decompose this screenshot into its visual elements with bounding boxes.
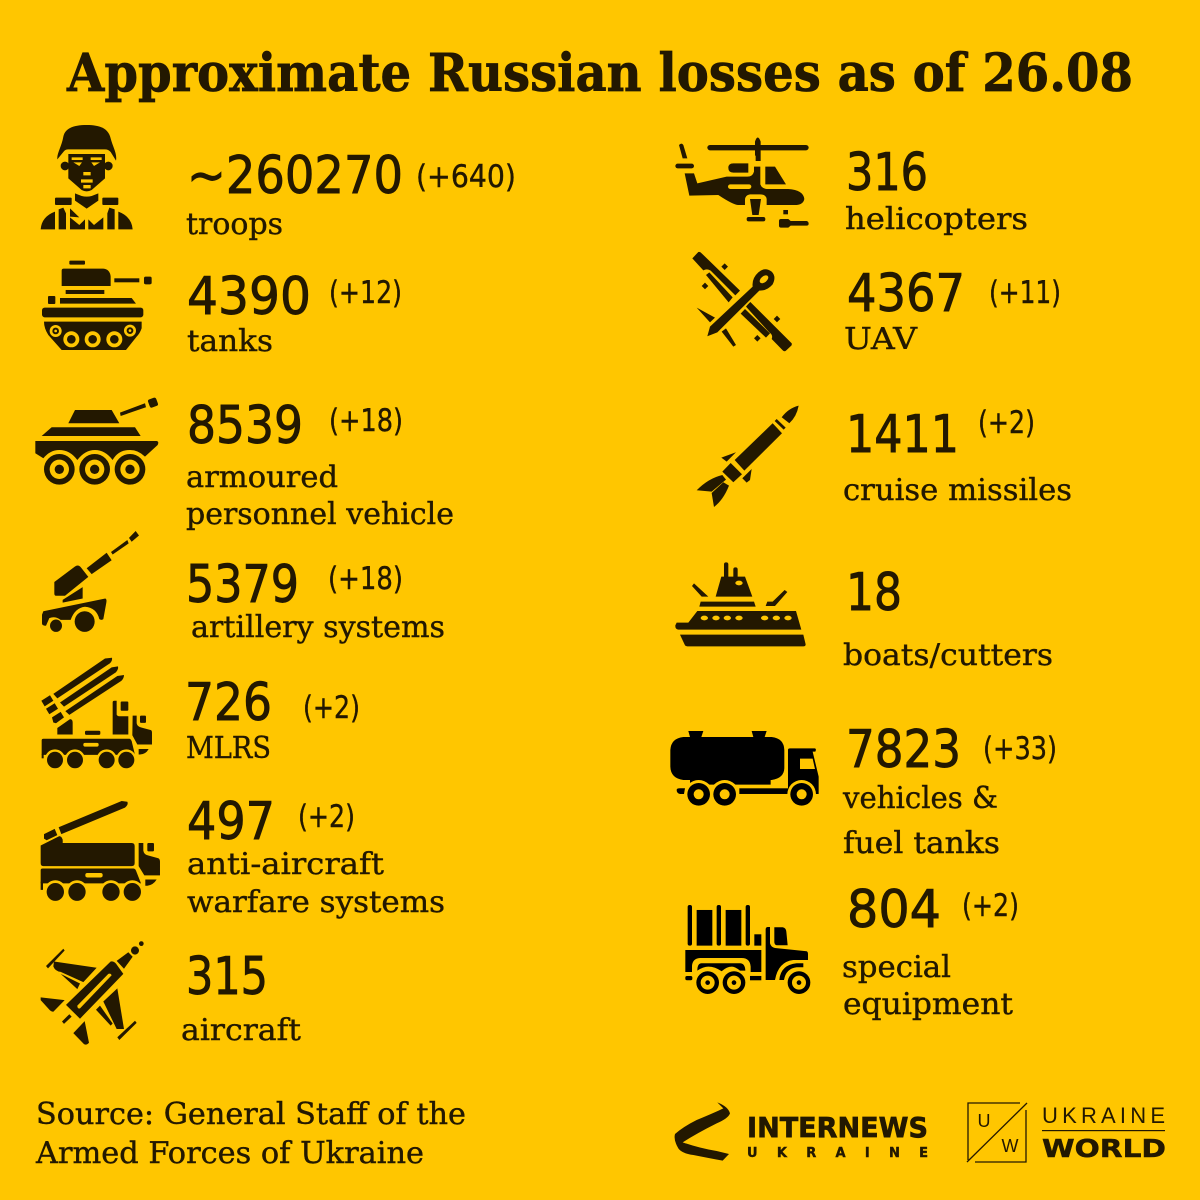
stat: anti-aircraft warfare systems bbox=[41, 792, 445, 920]
label bbox=[842, 950, 1013, 1022]
label: cruise missiles bbox=[843, 473, 1072, 508]
daily change: (+11) bbox=[989, 275, 1061, 311]
label: tanks bbox=[187, 324, 273, 359]
value: 316 bbox=[846, 143, 928, 203]
label: artillery systems bbox=[191, 610, 445, 645]
value: 315 bbox=[186, 947, 268, 1007]
value: 1411 bbox=[846, 405, 959, 465]
logo: Ukraine World bbox=[967, 1103, 1166, 1163]
label: troops bbox=[186, 207, 283, 242]
icon: helicopter bbox=[675, 137, 809, 228]
icon: soldier bbox=[41, 125, 133, 229]
daily change: (+2) bbox=[978, 405, 1035, 441]
icon: rocket launcher bbox=[41, 658, 152, 771]
daily change: (+18) bbox=[329, 403, 403, 439]
value: 7823 bbox=[846, 720, 961, 780]
label: equipment bbox=[843, 987, 1013, 1022]
logo: Internews Ukraine: UKRAINE bbox=[747, 1146, 928, 1161]
stat: troops bbox=[41, 125, 516, 242]
icon: tank bbox=[42, 261, 152, 350]
value: 5379 bbox=[186, 555, 299, 615]
daily change: (+33) bbox=[983, 731, 1057, 767]
logo: Ukraine World: WORLD bbox=[1042, 1134, 1166, 1163]
logo: Ukraine World: W bbox=[1002, 1136, 1018, 1156]
label: anti-aircraft bbox=[187, 847, 384, 882]
value: 804 bbox=[847, 880, 941, 940]
label bbox=[842, 781, 1000, 861]
label bbox=[186, 460, 454, 532]
value: 8539 bbox=[187, 396, 303, 456]
daily change: (+2) bbox=[303, 690, 360, 726]
daily change: (+12) bbox=[329, 275, 402, 311]
value: 497 bbox=[187, 792, 275, 852]
stat: MLRS bbox=[41, 658, 360, 771]
stat: tanks bbox=[42, 261, 402, 359]
daily change: (+2) bbox=[298, 799, 355, 835]
icon: cruise missile bbox=[697, 406, 799, 507]
logo mark: ribbon bbox=[675, 1102, 730, 1161]
label: personnel vehicle bbox=[186, 497, 454, 532]
icon: armoured vehicle bbox=[35, 397, 159, 485]
logo: Ukraine World: U bbox=[978, 1111, 990, 1131]
value: 4390 bbox=[187, 267, 311, 327]
stat: boats/cutters bbox=[675, 562, 1053, 673]
icon: fighter jet bbox=[41, 941, 144, 1045]
label: MLRS bbox=[186, 731, 271, 766]
icon: cargo truck bbox=[685, 905, 810, 994]
stat: aircraft bbox=[41, 941, 301, 1048]
logo: Ukraine World: UKRAINE bbox=[1042, 1103, 1165, 1128]
label: special bbox=[842, 950, 951, 985]
source note: Source: General Staff of the bbox=[36, 1097, 466, 1132]
icon: anti-aircraft launcher bbox=[41, 801, 160, 904]
label bbox=[187, 847, 445, 920]
icon: warship bbox=[675, 562, 806, 646]
logo: Internews Ukraine: INTERNEWS bbox=[747, 1111, 928, 1144]
label: helicopters bbox=[845, 202, 1028, 237]
stat: helicopters bbox=[675, 137, 1028, 237]
label: aircraft bbox=[181, 1013, 301, 1048]
daily change: (+640) bbox=[416, 159, 516, 195]
icon: fuel tanker truck bbox=[670, 731, 819, 809]
source note: Armed Forces of Ukraine bbox=[35, 1136, 424, 1171]
title: Approximate Russian losses as of 26.08 bbox=[66, 43, 1133, 104]
label: boats/cutters bbox=[843, 638, 1053, 673]
icon: drone bbox=[692, 252, 792, 351]
value: ~260270 bbox=[187, 146, 403, 206]
icon: artillery gun bbox=[42, 531, 139, 632]
value: 4367 bbox=[847, 264, 965, 324]
value: 18 bbox=[846, 563, 902, 623]
logo mark: UW square bbox=[967, 1103, 1027, 1162]
stat: special equipment bbox=[685, 880, 1019, 1022]
daily change: (+18) bbox=[328, 561, 403, 597]
daily change: (+2) bbox=[962, 888, 1019, 924]
logo: Internews Ukraine bbox=[675, 1102, 928, 1161]
stat: armoured personnel vehicle bbox=[35, 396, 454, 532]
label: vehicles & bbox=[842, 781, 998, 816]
stat: UAV bbox=[692, 252, 1061, 357]
label: fuel tanks bbox=[843, 826, 1000, 861]
label: UAV bbox=[844, 322, 918, 357]
stat: artillery systems bbox=[42, 531, 445, 645]
stat: vehicles and fuel tanks bbox=[670, 720, 1057, 861]
source note bbox=[35, 1097, 466, 1171]
stat: cruise missiles bbox=[697, 405, 1072, 508]
value: 726 bbox=[185, 673, 272, 733]
label: warfare systems bbox=[187, 885, 445, 920]
label: armoured bbox=[186, 460, 338, 495]
